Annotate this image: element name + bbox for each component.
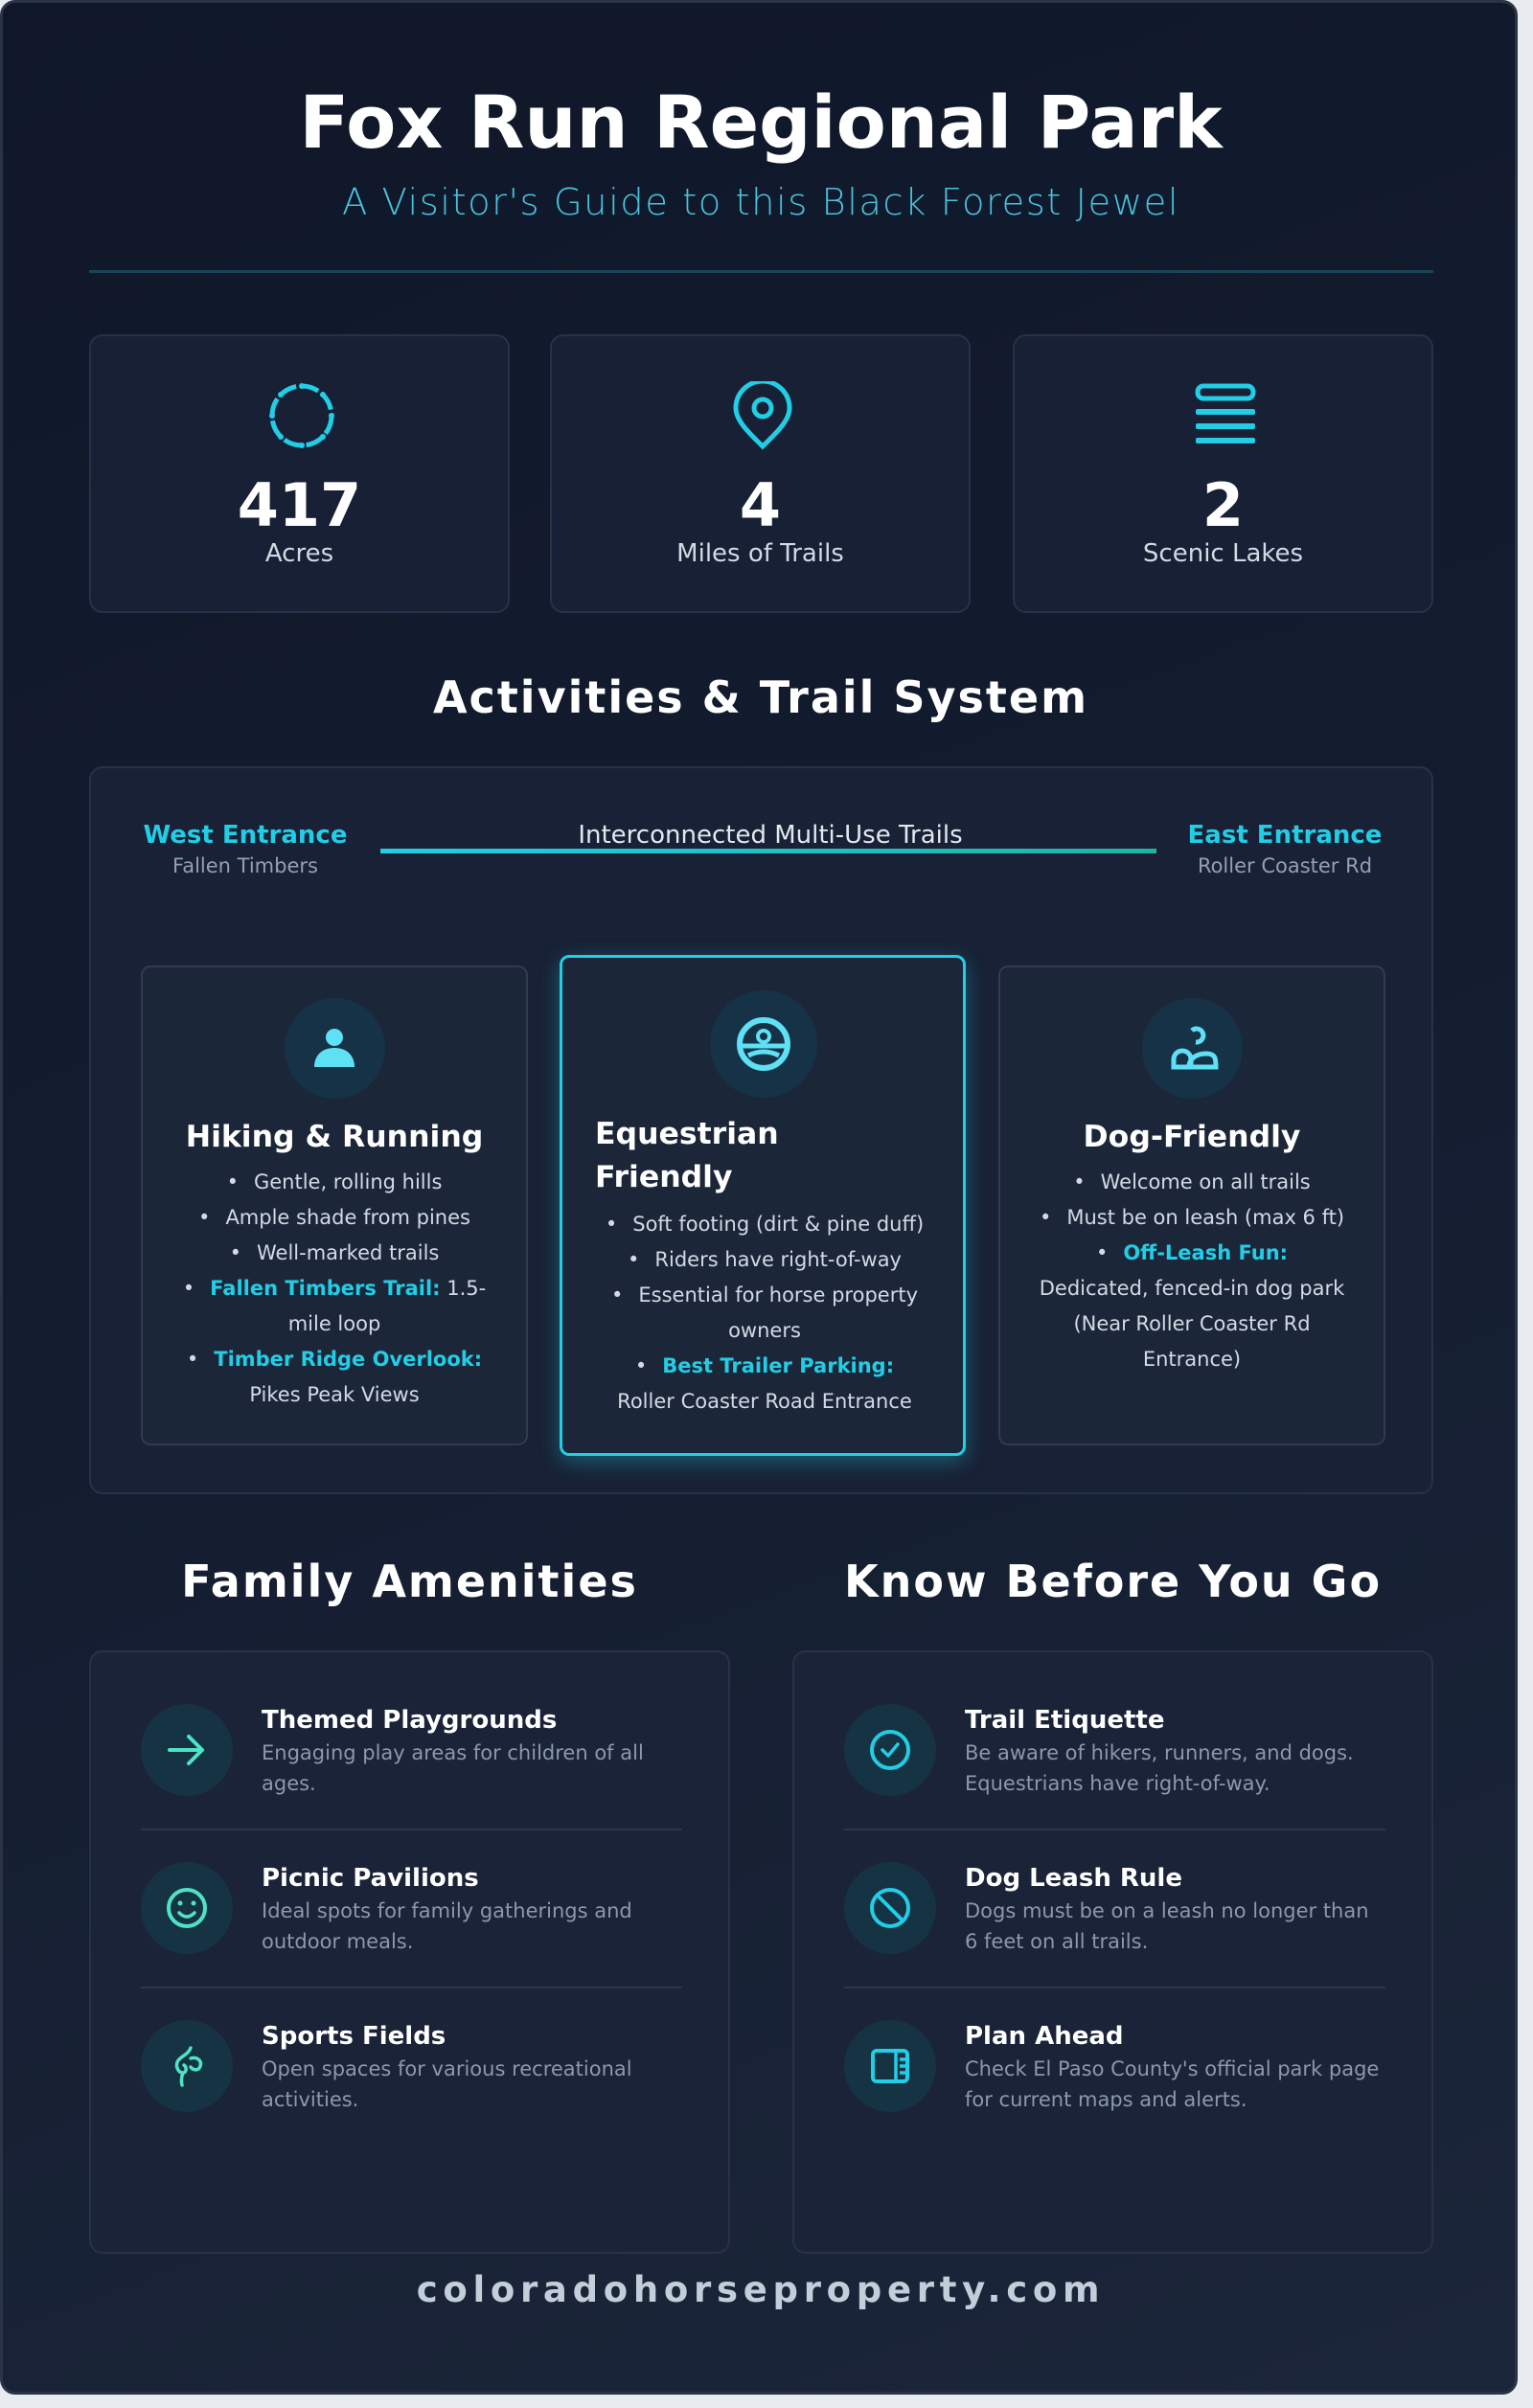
card: equestrian (highlighted): Roller Coaster Road Entrance xyxy=(617,1390,912,1413)
item: picnic: Ideal spots for family gatherings and outdoor meals. xyxy=(262,1899,632,1953)
card: equestrian (highlighted): Soft footing (dirt & pine duff) xyxy=(632,1213,924,1236)
heading: know before you go: Know Before You Go xyxy=(844,1556,1382,1607)
card: dog-friendly: Welcome on all trails xyxy=(1101,1170,1311,1193)
icon: circle xyxy=(269,383,334,448)
trail line xyxy=(380,849,1156,853)
item: leash rule xyxy=(844,1862,1369,1954)
card: equestrian (highlighted) xyxy=(560,955,966,1456)
card: equestrian (highlighted): Riders have right-of-way xyxy=(654,1248,902,1271)
item: plan ahead: Plan Ahead xyxy=(965,2022,1123,2051)
item: etiquette: Be aware of hikers, runners, and dogs. Equestrians have right-of-way. xyxy=(965,1741,1354,1795)
card: dog-friendly: Dedicated, fenced-in dog park (Near Roller Coaster Rd Entrance) xyxy=(1040,1277,1344,1371)
west entrance: West Entrance xyxy=(144,821,347,850)
heading: activities: Activities & Trail System xyxy=(433,671,1088,723)
item: leash rule: Dog Leash Rule xyxy=(965,1864,1182,1893)
card: dog-friendly: Must be on leash (max 6 ft) xyxy=(1066,1206,1344,1229)
stat: miles: 4 xyxy=(740,470,781,540)
card: dog-friendly: Off-Leash Fun: xyxy=(1123,1241,1288,1264)
item: leash rule: Dogs must be on a leash no longer than 6 feet on all trails. xyxy=(965,1899,1369,1953)
panel: know before you go xyxy=(792,1650,1433,2254)
card: hiking: Fallen Timbers Trail: 1.5-mile loop xyxy=(210,1277,486,1335)
item: playgrounds xyxy=(141,1704,644,1796)
item: sports: Sports Fields xyxy=(262,2022,446,2051)
stat: lakes: Scenic Lakes xyxy=(1143,539,1303,568)
item: sports xyxy=(141,2020,632,2112)
card: hiking: Pikes Peak Views xyxy=(249,1383,420,1406)
item: picnic xyxy=(141,1862,632,1954)
stat: miles xyxy=(550,334,971,613)
icon: dog xyxy=(1142,998,1243,1099)
east entrance: Roller Coaster Rd xyxy=(1198,854,1372,877)
stat: acres xyxy=(89,334,510,613)
icon: map pin xyxy=(734,381,791,450)
footer: coloradohorseproperty.com xyxy=(417,2269,1105,2310)
stat: miles: Miles of Trails xyxy=(676,539,844,568)
card: dog-friendly: Dog-Friendly xyxy=(1084,1120,1300,1154)
card: equestrian (highlighted): Equestrian xyxy=(595,1117,779,1151)
card: equestrian (highlighted): Best Trailer Parking: xyxy=(662,1354,894,1377)
card: hiking xyxy=(141,965,528,1445)
stat: lakes: 2 xyxy=(1202,470,1244,540)
stat: lakes xyxy=(1013,334,1433,613)
item: etiquette: Trail Etiquette xyxy=(965,1706,1164,1735)
stat: acres: 417 xyxy=(238,470,361,540)
east entrance xyxy=(1188,821,1382,877)
item: sports: Open spaces for various recreational activities. xyxy=(262,2057,632,2111)
card: hiking: Gentle, rolling hills xyxy=(254,1170,442,1193)
card: dog-friendly xyxy=(998,965,1385,1445)
item: etiquette xyxy=(844,1704,1354,1796)
card: hiking: Ample shade from pines xyxy=(225,1206,470,1229)
stat: acres: Acres xyxy=(265,539,333,568)
icon: person xyxy=(285,998,385,1099)
subtitle: A Visitor's Guide to this Black Forest Jewel xyxy=(342,181,1179,224)
item: plan ahead: Check El Paso County's official park page for current maps and alerts. xyxy=(965,2057,1379,2111)
icon: layers xyxy=(1196,383,1255,443)
card: hiking: Hiking & Running xyxy=(186,1120,483,1154)
east entrance: East Entrance xyxy=(1188,821,1382,850)
card: equestrian (highlighted): Essential for horse property owners xyxy=(638,1284,918,1342)
trail label: Interconnected Multi-Use Trails xyxy=(578,821,963,850)
panel: family amenities xyxy=(89,1650,730,2254)
item: playgrounds: Themed Playgrounds xyxy=(262,1706,557,1735)
west entrance xyxy=(144,821,347,877)
item: picnic: Picnic Pavilions xyxy=(262,1864,479,1893)
card: hiking: Well-marked trails xyxy=(257,1241,439,1264)
item: playgrounds: Engaging play areas for children of all ages. xyxy=(262,1741,644,1795)
heading: family amenities: Family Amenities xyxy=(181,1556,638,1607)
card: equestrian (highlighted): Friendly xyxy=(595,1160,733,1194)
west entrance: Fallen Timbers xyxy=(172,854,318,877)
title: Fox Run Regional Park xyxy=(299,80,1223,165)
item: plan ahead xyxy=(844,2020,1379,2112)
icon: equestrian xyxy=(710,990,817,1098)
panel: activities xyxy=(89,766,1433,1494)
card: hiking: Timber Ridge Overlook: xyxy=(214,1348,482,1371)
